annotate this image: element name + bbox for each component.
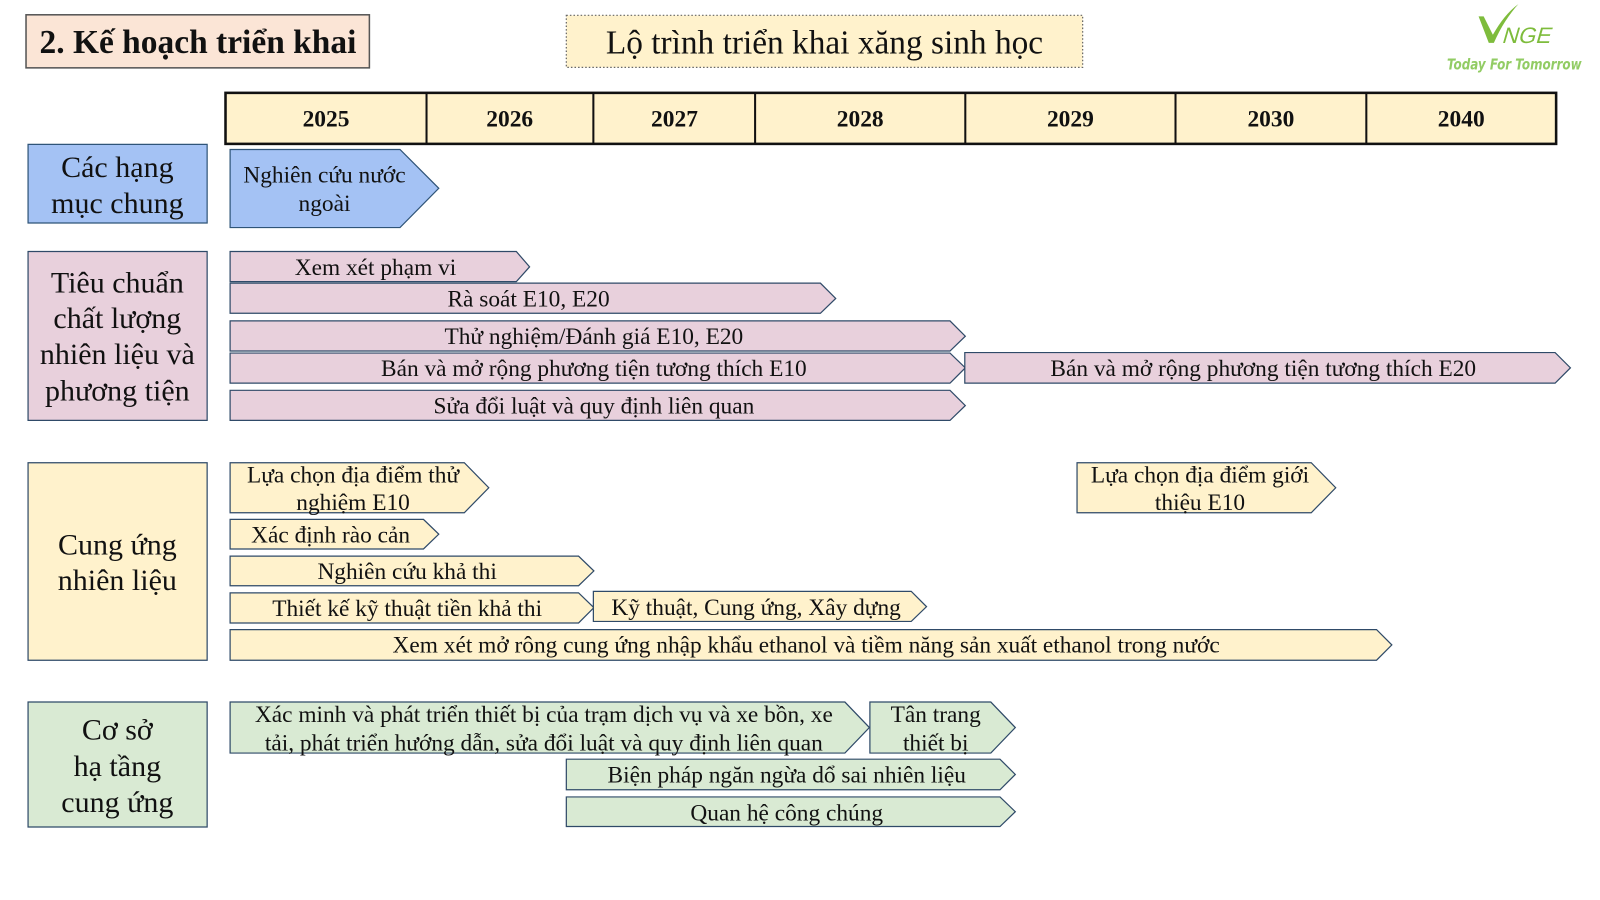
panel: general items bbox=[28, 144, 439, 228]
arrow: E10 E20 review: Rà soát E10, E20 bbox=[447, 287, 610, 313]
arrow: scope review bbox=[230, 252, 530, 282]
arrow: public relations: Quan hệ công chúng bbox=[690, 800, 883, 826]
logo: VNGE: NGE bbox=[1500, 22, 1556, 48]
arrow: ethanol supply: Xem xét mở rông cung ứng nhập khẩu ethanol và tiềm năng sản xuất ethanol trong nước bbox=[393, 633, 1220, 659]
category label: infrastructure: hạ tầng bbox=[74, 750, 161, 783]
arrow: law amendments bbox=[230, 390, 965, 420]
arrow: barriers: Xác định rào cản bbox=[251, 522, 410, 548]
arrow: E10 vehicles: Bán và mở rộng phương tiện tương thích E10 bbox=[381, 356, 807, 382]
category label: general items: Các hạng bbox=[61, 151, 174, 184]
arrow: station equipment bbox=[230, 702, 869, 757]
category label: standards: Tiêu chuẩn bbox=[51, 266, 184, 299]
timeline header: 2026 bbox=[486, 107, 533, 133]
title bbox=[26, 15, 369, 68]
arrow: pre-feasibility design bbox=[230, 593, 594, 623]
arrow: E20 vehicles: Bán và mở rộng phương tiện tương thích E20 bbox=[1050, 356, 1476, 382]
arrow: ethanol supply bbox=[230, 630, 1392, 660]
timeline header: 2025 bbox=[303, 107, 349, 133]
arrow: misfuelling prevention bbox=[566, 759, 1015, 790]
timeline header: 2040 bbox=[1438, 107, 1485, 133]
category label: infrastructure: Cơ sở bbox=[82, 713, 154, 746]
arrow: E10 launch site: thiệu E10 bbox=[1155, 490, 1245, 516]
subtitle: roadmap heading: Lộ trình triển khai xăng sinh học bbox=[606, 25, 1043, 62]
arrow: E10 E20 testing bbox=[230, 321, 965, 351]
arrow: equipment refurbishment bbox=[870, 702, 1015, 757]
title: 2. Kế hoạch triển khai bbox=[40, 24, 356, 61]
arrow: foreign research bbox=[230, 149, 439, 228]
panel: fuel and vehicle quality standards bbox=[28, 252, 1570, 420]
arrow: feasibility study: Nghiên cứu khả thi bbox=[317, 559, 497, 585]
arrow: E10 test site bbox=[230, 463, 489, 516]
arrow: E10 test site: nghiệm E10 bbox=[296, 490, 410, 516]
category label: standards bbox=[28, 252, 207, 420]
arrow: pre-feasibility design: Thiết kế kỹ thuật tiền khả thi bbox=[272, 596, 543, 622]
panel: fuel supply bbox=[28, 463, 1392, 660]
arrow: foreign research: Nghiên cứu nước bbox=[243, 163, 406, 189]
arrow: E10 launch site: Lựa chọn địa điểm giới bbox=[1091, 463, 1310, 489]
arrow: public relations bbox=[566, 797, 1015, 827]
arrow: equipment refurbishment: Tân trang bbox=[891, 702, 981, 728]
arrow: law amendments: Sửa đổi luật và quy định liên quan bbox=[433, 393, 755, 419]
arrow: E20 vehicles bbox=[965, 353, 1570, 383]
arrow: misfuelling prevention: Biện pháp ngăn ngừa dổ sai nhiên liệu bbox=[608, 763, 966, 789]
category label: standards: chất lượng bbox=[53, 302, 181, 335]
arrow: foreign research: ngoài bbox=[299, 191, 351, 217]
category label: infrastructure bbox=[28, 702, 207, 827]
category label: infrastructure: cung ứng bbox=[61, 786, 173, 819]
arrow: scope review: Xem xét phạm vi bbox=[295, 255, 457, 281]
arrow: station equipment: Xác minh và phát triển thiết bị của trạm dịch vụ và xe bồn, xe bbox=[255, 702, 833, 728]
arrow: E10 test site: Lựa chọn địa điểm thử bbox=[247, 463, 460, 489]
logo: VNGE bbox=[1447, 4, 1582, 73]
arrow: equipment refurbishment: thiết bị bbox=[903, 731, 969, 757]
timeline header: 2028 bbox=[837, 107, 884, 133]
timeline header: 2027 bbox=[651, 107, 698, 133]
arrow: E10 E20 review bbox=[230, 283, 836, 313]
timeline header: 2030 bbox=[1247, 107, 1294, 133]
category label: standards: nhiên liệu và bbox=[40, 338, 195, 371]
subtitle: roadmap heading bbox=[566, 15, 1083, 67]
arrow: E10 launch site bbox=[1077, 463, 1336, 516]
panel: supply infrastructure bbox=[28, 702, 1015, 827]
arrow: engineering procurement construction: Kỹ thuật, Cung ứng, Xây dựng bbox=[611, 595, 901, 621]
timeline header bbox=[226, 93, 1556, 144]
arrow: feasibility study bbox=[230, 556, 594, 586]
arrow: E10 vehicles bbox=[230, 353, 965, 383]
category label: fuel supply: nhiên liệu bbox=[58, 564, 177, 597]
arrow: station equipment: tải, phát triển hướng dẫn, sửa đổi luật và quy định liên quan bbox=[265, 731, 823, 757]
category label: general items: mục chung bbox=[51, 187, 184, 220]
category label: standards: phương tiện bbox=[45, 375, 190, 408]
category label: general items bbox=[28, 144, 207, 223]
category label: fuel supply: Cung ứng bbox=[58, 529, 177, 562]
arrow: E10 E20 testing: Thử nghiệm/Đánh giá E10, E20 bbox=[444, 324, 743, 350]
arrow: barriers bbox=[230, 519, 439, 549]
timeline header: 2029 bbox=[1047, 107, 1094, 133]
category label: fuel supply bbox=[28, 463, 207, 660]
